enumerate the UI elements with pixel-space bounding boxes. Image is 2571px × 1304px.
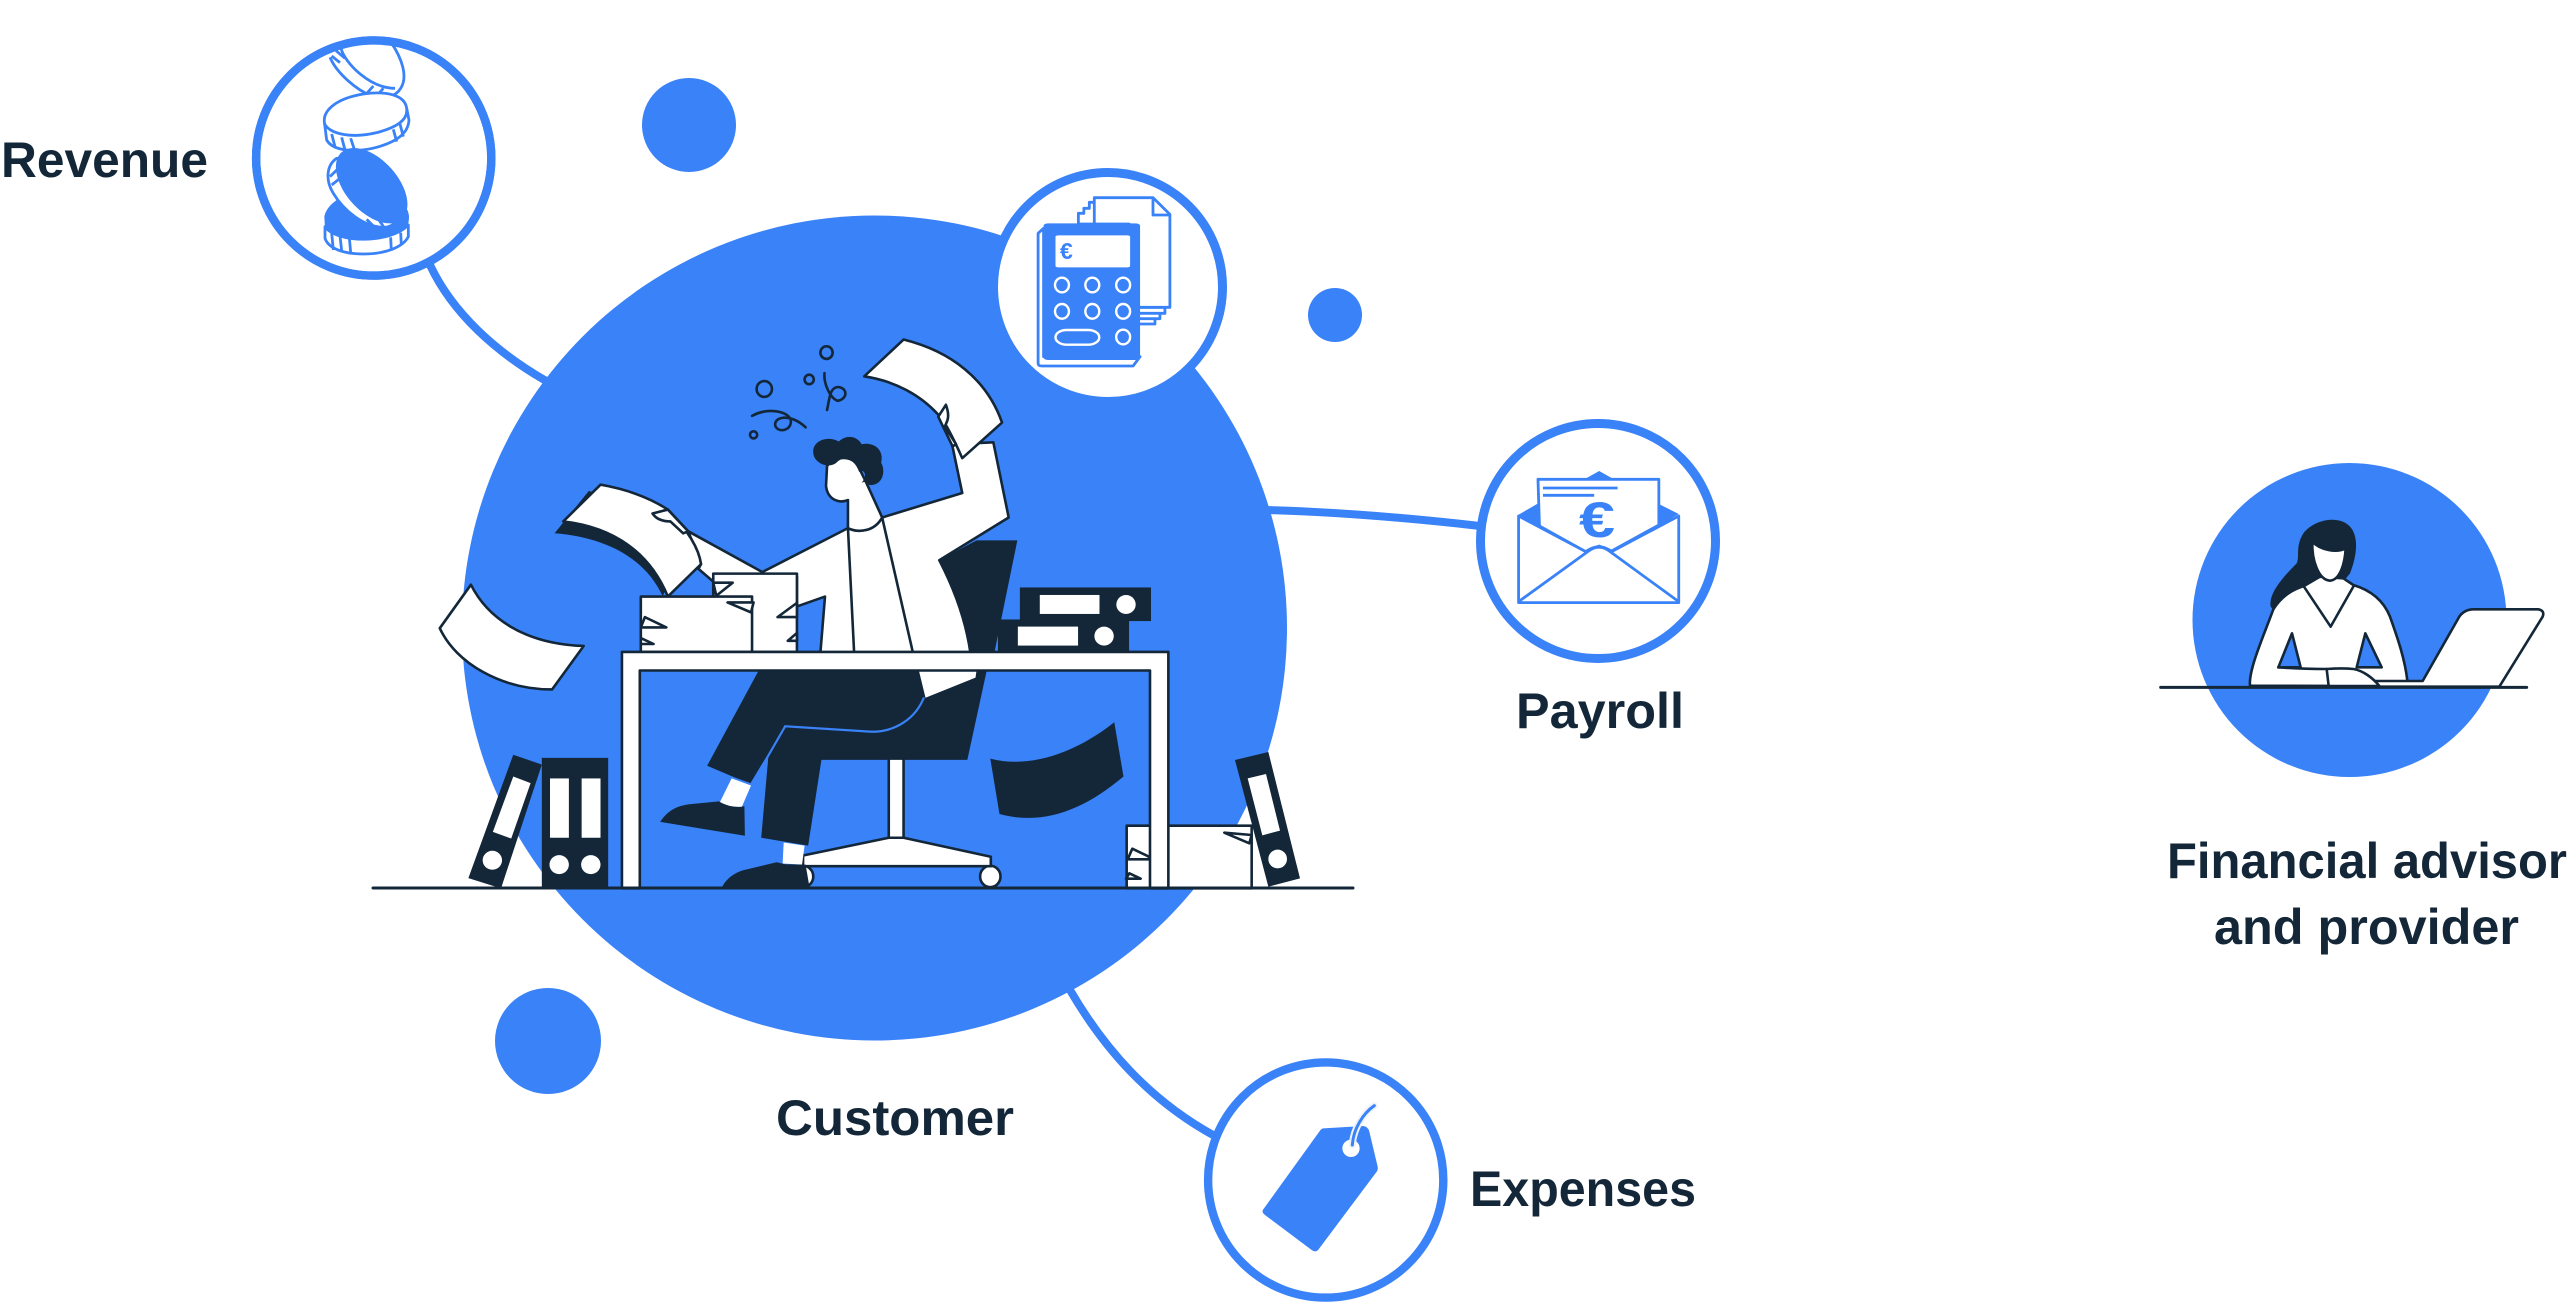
right shirt arm and torso [688,442,1009,653]
binders left [468,755,608,888]
binders on desk [998,587,1151,652]
illustration: financial advisor [2161,463,2543,777]
ground line [373,886,1353,890]
trousers [707,670,987,846]
left paper with shadow and hand [555,485,701,597]
icon: calculator with documents: € [1060,238,1073,264]
flying paper far left [440,585,584,689]
man, desk and papers [440,340,1168,888]
connector: payroll to customer [1265,510,1480,526]
connector: revenue to customer [430,265,548,382]
right paper and hand [864,340,1002,458]
hair [813,437,883,485]
neck and head [826,458,882,531]
connector: expenses to customer [1070,990,1213,1135]
icon: payroll envelope [1480,424,1716,658]
label: Revenue: Revenue [1,132,208,188]
icon: revenue coins [256,40,491,276]
illustration: stressed customer at desk [373,340,1353,888]
office chair back [939,540,1017,653]
stress squiggles [750,346,845,438]
leaning binder right [1235,752,1300,887]
icon: calculator with documents [994,172,1222,402]
stacked papers on floor [1126,826,1252,888]
trouser crease [732,697,924,784]
label: Financial advisor and provider [2167,833,2567,955]
label: Financial advisor and provider: Financial advisor [2167,833,2567,889]
icon: expenses price tag [1208,1062,1443,1298]
icon: payroll envelope: € [1579,492,1615,548]
label: Expenses: Expenses [1470,1161,1696,1217]
decorative dot bottom [495,988,601,1094]
label: Payroll: Payroll [1516,683,1684,739]
decorative dot right [1308,288,1362,342]
paper stacks on desk [641,574,797,652]
shirt tail [919,670,977,698]
desk [622,652,1168,888]
customer background circle [462,216,1287,1040]
label: Financial advisor and provider: and provider [2214,899,2519,955]
chair stem and base [793,755,1001,887]
socks and shoes [660,778,810,888]
decorative dot top [642,78,736,172]
label: Customer: Customer [776,1090,1014,1146]
floating paper dark [990,722,1123,818]
